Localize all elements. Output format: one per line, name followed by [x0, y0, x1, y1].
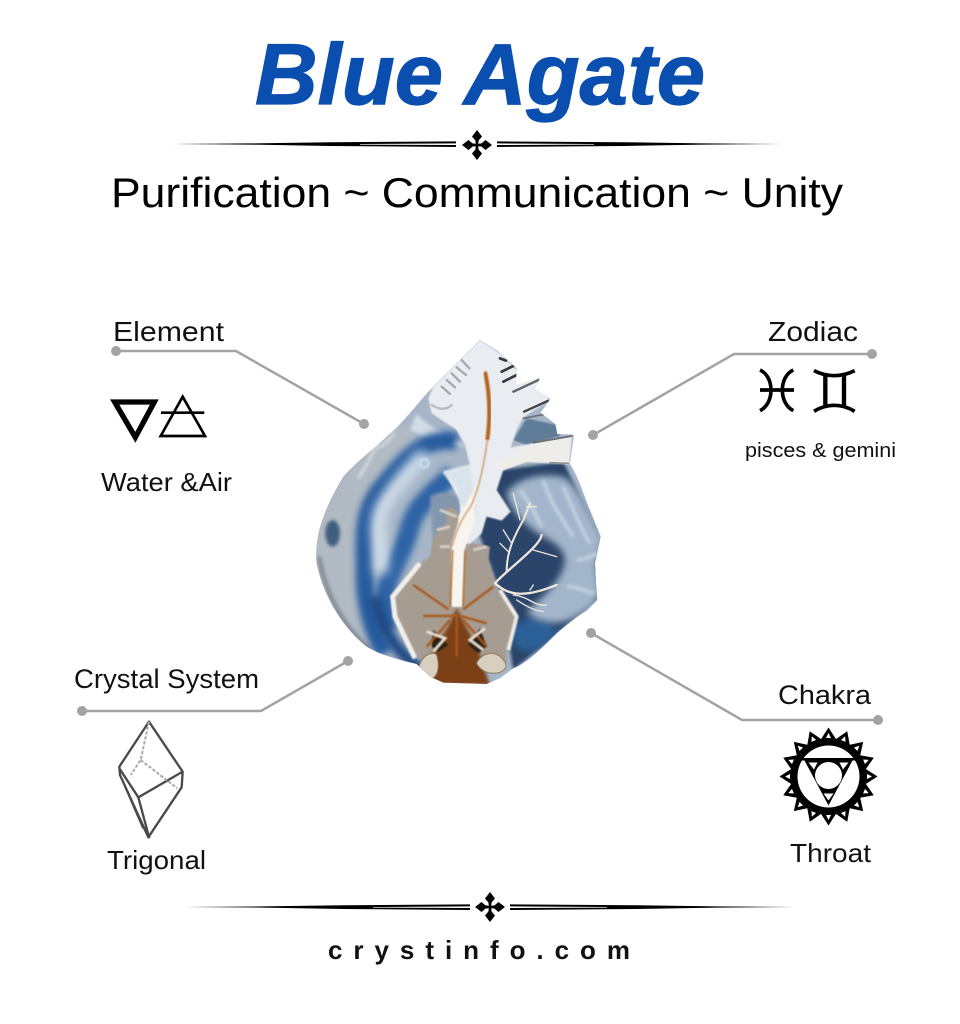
icon: water and air triangles: [115, 397, 205, 437]
blue band outer: [365, 440, 457, 653]
connector: crystal system: [77, 656, 353, 716]
heading: chakra: Chakra: [778, 680, 872, 710]
panel: crystal system: [74, 664, 259, 875]
feather ridges: [432, 358, 572, 463]
connector: chakra: [586, 628, 883, 725]
dark mineral spot: [325, 520, 340, 547]
band behind tan zone: [428, 490, 460, 540]
pale centre of band: [378, 453, 425, 573]
shell curls: [418, 653, 438, 680]
dark right field: [473, 462, 600, 670]
upper right grey-blue: [513, 418, 560, 445]
panel: chakra: [778, 680, 878, 868]
icon: top ornament: [462, 130, 492, 160]
connector: zodiac: [588, 349, 877, 440]
label: trigonal: Trigonal: [107, 845, 206, 875]
subtitle: Purification ~ Communication ~ Unity: [111, 169, 843, 216]
label: throat: Throat: [790, 838, 872, 868]
icon: pisces and gemini: [760, 370, 855, 411]
central orange vein: [485, 372, 489, 440]
heading: zodiac: Zodiac: [768, 316, 858, 347]
website footer: crystinfo.com: [328, 935, 630, 965]
panel: element: [101, 316, 232, 497]
top divider: [172, 130, 782, 160]
connector: element: [111, 346, 369, 429]
icon: trigonal crystal: [119, 722, 183, 838]
pale dendrite cloud: [507, 475, 603, 623]
heading: crystal system: Crystal System: [74, 664, 259, 694]
dendrite branches: [495, 493, 557, 612]
brown root: [427, 608, 490, 685]
tan zone: [392, 507, 517, 663]
blue band inner: [385, 473, 453, 630]
label: pisces and gemini: pisces & gemini: [745, 440, 896, 462]
heading: element: Element: [113, 316, 224, 347]
icon: throat chakra: [780, 728, 878, 826]
panel: zodiac: [745, 316, 896, 462]
label: water and air: Water &Air: [101, 467, 232, 497]
title: Blue Agate: [255, 27, 705, 123]
icon: bottom ornament: [475, 892, 505, 922]
bottom divider: [185, 892, 795, 922]
illustration: blue agate stone: [316, 340, 601, 684]
stone base: [316, 340, 600, 684]
white feather: [428, 340, 572, 607]
